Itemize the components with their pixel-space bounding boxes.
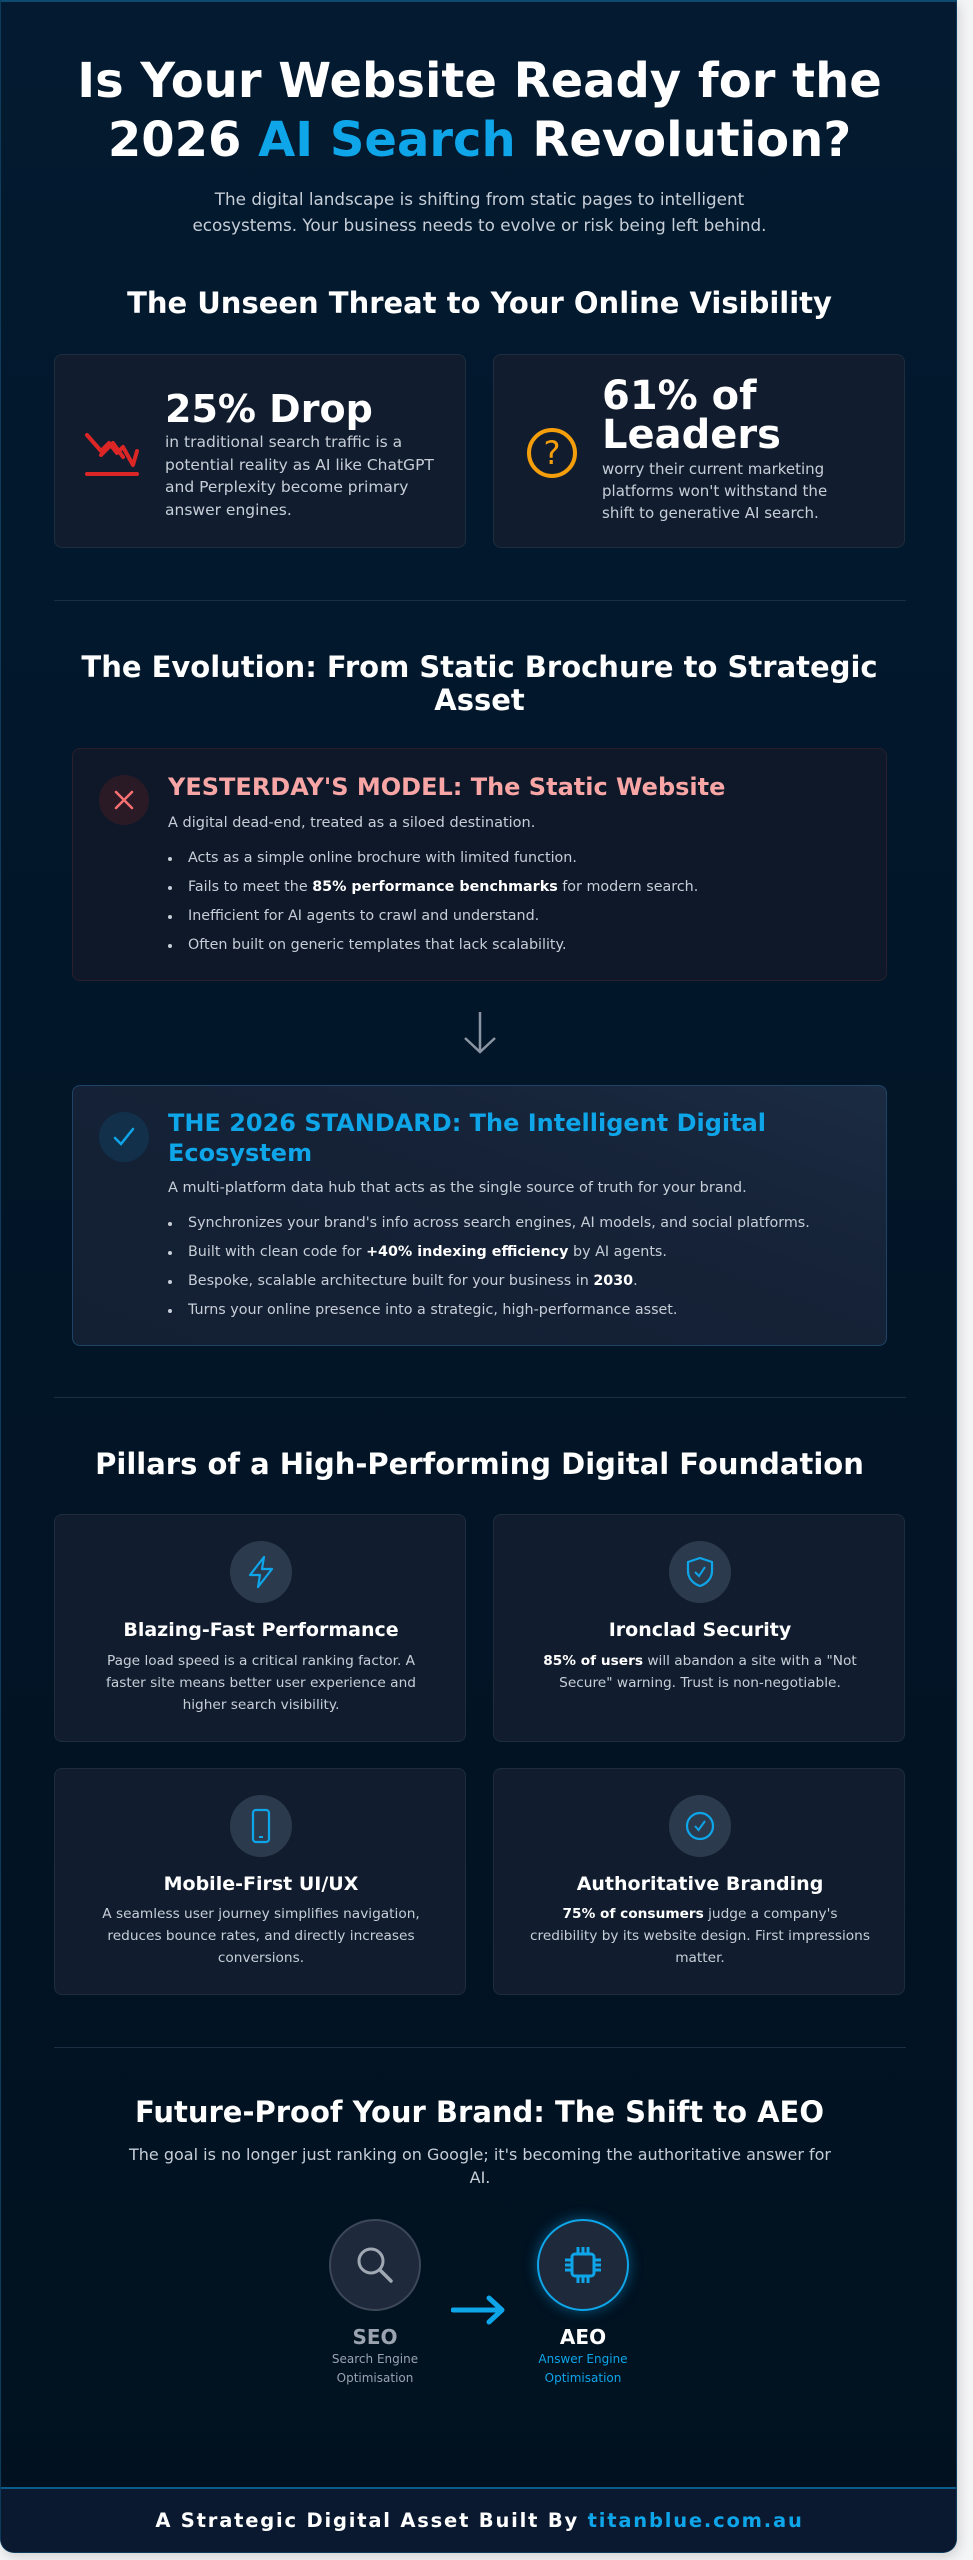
bullet list: Often built on generic templates that lack scalability. [188, 937, 567, 953]
pillar: performance: faster site means better user experience and [106, 1675, 416, 1691]
bullet list: Fails to meet the 85% performance benchmarks for modern search. [188, 879, 698, 895]
pillar: performance: Page load speed is a critical ranking factor. A [107, 1653, 415, 1669]
heading: evolution [81, 650, 878, 717]
stat text [602, 373, 827, 522]
diagram: SEO: Optimisation [337, 2371, 413, 2385]
icon: search [329, 2219, 421, 2311]
pillar: performance: higher search visibility. [183, 1697, 339, 1713]
stat card: 61% of leaders [493, 354, 905, 548]
heading: AEO: Future-Proof Your Brand: The Shift to AEO [135, 2095, 824, 2129]
pillar: performance [54, 1514, 466, 1742]
pillar: branding [493, 1768, 905, 1995]
icon: chip [537, 2219, 629, 2311]
description: A multi-platform data hub that acts as the single source of truth for your brand. [168, 1180, 747, 1196]
diagram: AEO: Optimisation [545, 2371, 621, 2385]
heading: THE 2026 STANDARD: The Intelligent Digital [168, 1109, 766, 1137]
stat text: 61% of [602, 373, 757, 419]
subtitle: The digital landscape is shifting from static pages to intelligent [215, 189, 744, 209]
panel: yesterday's model [72, 748, 887, 981]
icon: check [99, 1112, 149, 1162]
arrow: down [464, 1012, 496, 1054]
title: 2026 AI Search Revolution? [108, 112, 851, 168]
pillar: mobile: Mobile-First UI/UX [164, 1873, 358, 1895]
description: A digital dead-end, treated as a siloed destination. [168, 815, 535, 831]
diagram: SEO: Search Engine [332, 2352, 418, 2366]
stat text: worry their current marketing platforms won't withstand the shift to generative AI search. [602, 460, 827, 522]
heading: unseen threat: The Unseen Threat to Your Online Visibility [127, 286, 832, 320]
stat text: in traditional search traffic is a potential reality as AI like ChatGPT and Perplexity become primary answer engines. [165, 433, 434, 518]
bullet list: Acts as a simple online brochure with limited function. [188, 850, 577, 866]
bullet list: Inefficient for AI agents to crawl and understand. [188, 908, 539, 924]
heading: YESTERDAY'S MODEL: The Static Website [168, 773, 725, 801]
stat text: Leaders [602, 412, 781, 458]
pillar: mobile: reduces bounce rates, and directly increases [107, 1928, 415, 1944]
diagram: SEO: SEO [352, 2325, 398, 2349]
stat card: 25% drop [54, 354, 466, 548]
heading: evolution: Asset [434, 683, 525, 717]
footer [1, 2487, 958, 2555]
heading [168, 1109, 766, 1167]
stat text: 25% Drop [165, 387, 373, 431]
subtitle: ecosystems. Your business needs to evolve or risk being left behind. [192, 215, 767, 235]
diagram: SEO [329, 2219, 421, 2385]
icon: shield [669, 1541, 731, 1603]
subtitle: AEO: The goal is no longer just ranking on Google; it's becoming the authoritative answer for AI. [129, 2145, 831, 2187]
pillar: security: Ironclad Security [609, 1619, 791, 1641]
pillar: branding: matter. [675, 1950, 725, 1966]
title: Is Your Website Ready for the [77, 53, 882, 109]
heading: evolution: The Evolution: From Static Brochure to Strategic [81, 650, 878, 684]
title [77, 53, 882, 168]
pillar: mobile [54, 1768, 466, 1995]
icon: question [527, 428, 577, 478]
stat text [165, 387, 434, 518]
pillar: branding: 75% of consumers judge a company's [563, 1906, 837, 1922]
pillar: security [493, 1514, 905, 1742]
heading: pillars: Pillars of a High-Performing Digital Foundation [95, 1447, 864, 1481]
diagram: AEO [529, 2211, 637, 2385]
bullet list: Bespoke, scalable architecture built for your business in 2030. [188, 1273, 638, 1289]
bullet list: Built with clean code for +40% indexing efficiency by AI agents. [188, 1244, 667, 1260]
footer: A Strategic Digital Asset Built By titanblue.com.au [155, 2509, 804, 2532]
pillar: security: Secure" warning. Trust is non-negotiable. [559, 1675, 841, 1691]
icon: trending down [84, 432, 139, 476]
pillar: performance: Blazing-Fast Performance [123, 1619, 399, 1641]
pillar: branding: credibility by its website design. First impressions [530, 1928, 870, 1944]
icon: badge check [669, 1795, 731, 1857]
pillar: branding: Authoritative Branding [577, 1873, 823, 1895]
bullet list: Turns your online presence into a strategic, high-performance asset. [188, 1302, 677, 1318]
pillar: mobile: conversions. [218, 1950, 304, 1966]
icon: phone [230, 1795, 292, 1857]
subtitle [192, 189, 767, 235]
icon: bolt [230, 1541, 292, 1603]
pillar: mobile: A seamless user journey simplifies navigation, [102, 1906, 420, 1922]
diagram: AEO: Answer Engine [538, 2352, 628, 2366]
pillar: security: 85% of users will abandon a site with a "Not [543, 1653, 857, 1669]
icon: question: ? [544, 434, 560, 472]
heading: Ecosystem [168, 1139, 312, 1167]
bullet list [168, 1215, 810, 1318]
diagram: AEO: AEO [560, 2325, 606, 2349]
bullet list: Synchronizes your brand's info across search engines, AI models, and social platforms. [188, 1215, 810, 1231]
icon: x [99, 775, 149, 825]
bullet list [168, 850, 698, 953]
arrow: right [451, 2296, 504, 2324]
panel: 2026 standard [72, 1085, 887, 1346]
